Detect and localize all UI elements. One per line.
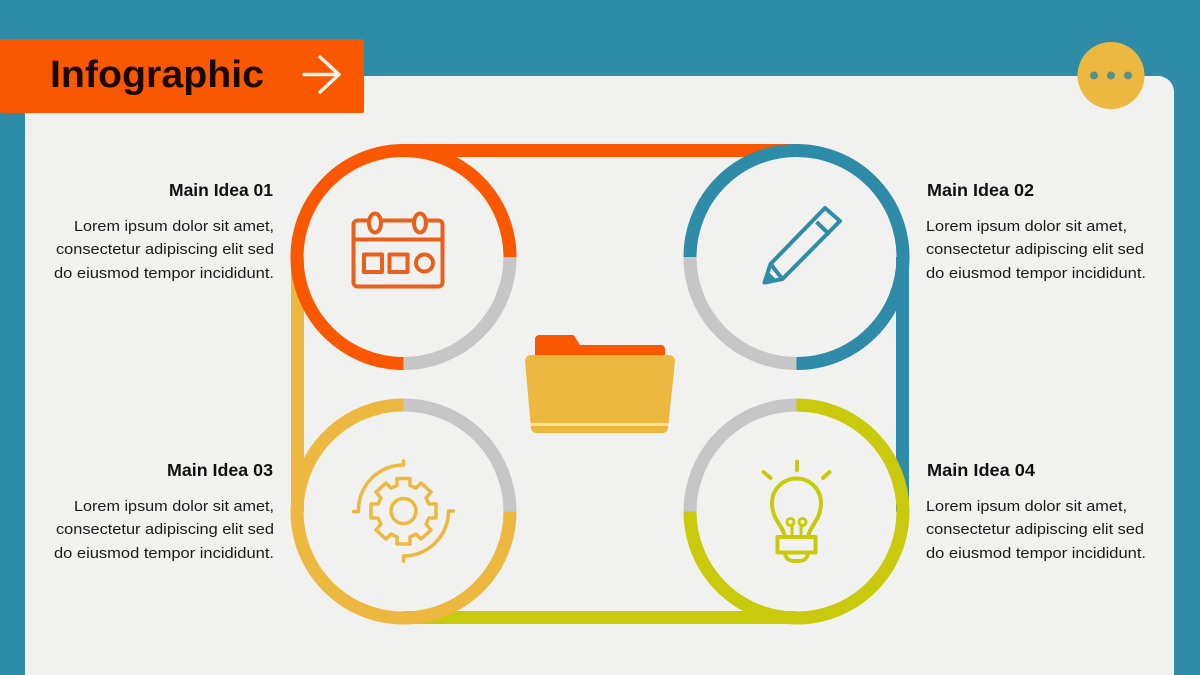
text block: Main Idea 04: Main Idea 04 <box>927 460 1035 480</box>
text block: Main Idea 03: consectetur adipiscing elit sed <box>56 522 274 538</box>
node: pencil ring <box>690 150 903 364</box>
icon: arrow <box>304 57 339 92</box>
title banner <box>0 39 364 113</box>
icon: gear with arrows <box>354 461 454 561</box>
text block: Main Idea 01: consectetur adipiscing elit sed <box>56 242 274 258</box>
menu badge <box>1078 42 1144 109</box>
text block: Main Idea 03 <box>54 460 274 562</box>
text block: Main Idea 02 <box>926 180 1146 282</box>
text block: Main Idea 01 <box>54 180 274 282</box>
node: gear ring <box>297 405 510 618</box>
text block: Main Idea 04: consectetur adipiscing elit sed <box>926 522 1144 538</box>
icon: pencil <box>764 208 840 282</box>
text block: Main Idea 03: Main Idea 03 <box>167 460 273 480</box>
text block: Main Idea 04: Lorem ipsum dolor sit amet, <box>926 499 1127 515</box>
node: calendar ring <box>297 150 510 364</box>
title: Infographic <box>50 54 264 96</box>
icon: light bulb <box>764 462 830 561</box>
text block: Main Idea 01: Lorem ipsum dolor sit amet, <box>74 219 274 235</box>
text block: Main Idea 03: Lorem ipsum dolor sit amet, <box>74 499 274 515</box>
text block: Main Idea 03: do eiusmod tempor incididunt. <box>54 546 274 562</box>
text block: Main Idea 02: Lorem ipsum dolor sit amet, <box>926 219 1127 235</box>
text block: Main Idea 04 <box>926 460 1146 562</box>
node: bulb ring <box>690 405 903 618</box>
text block: Main Idea 02: Main Idea 02 <box>927 180 1034 200</box>
text block: Main Idea 01: do eiusmod tempor incididunt. <box>54 266 274 282</box>
text block: Main Idea 02: do eiusmod tempor incididunt. <box>926 266 1146 282</box>
text block: Main Idea 02: consectetur adipiscing elit sed <box>926 242 1144 258</box>
text block: Main Idea 04: do eiusmod tempor incididunt. <box>926 546 1146 562</box>
text block: Main Idea 01: Main Idea 01 <box>169 180 273 200</box>
icon: calendar <box>354 214 442 286</box>
icon: folder <box>525 335 675 433</box>
connector frame <box>298 150 902 618</box>
